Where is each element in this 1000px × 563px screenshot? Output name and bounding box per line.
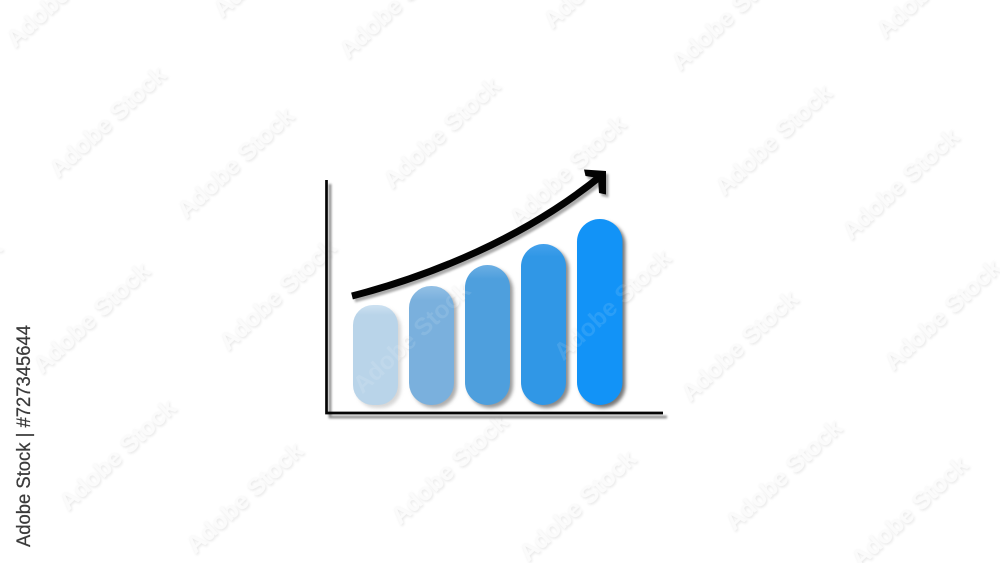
watermark: repeated Adobe Stock text: Adobe Stock <box>378 72 506 194</box>
bar chart <box>326 170 677 417</box>
side label: stock id: Adobe Stock | #727345644 <box>14 325 35 547</box>
watermark: repeated Adobe Stock text: Adobe Stock <box>54 394 182 516</box>
watermark: repeated Adobe Stock text: Adobe Stock <box>348 277 476 399</box>
watermark: repeated Adobe Stock text: Adobe Stock <box>837 123 965 245</box>
watermark: repeated Adobe Stock text: Adobe Stock <box>172 102 300 224</box>
watermark over bars: Adobe Stock <box>549 244 677 366</box>
watermark over bars: Adobe Stock <box>348 277 476 399</box>
watermark: repeated Adobe Stock text: Adobe Stock <box>386 408 514 530</box>
watermark: repeated Adobe Stock text: Adobe Stock <box>720 414 848 536</box>
bar 4 <box>521 244 569 408</box>
watermark: repeated Adobe Stock text: Adobe Stock <box>549 244 677 366</box>
watermark over bars <box>348 244 677 399</box>
watermark: repeated Adobe Stock text: Adobe Stock <box>44 61 172 183</box>
watermark: repeated Adobe Stock text: Adobe Stock <box>676 285 804 407</box>
watermark: repeated Adobe Stock text: Adobe Stock <box>214 234 342 356</box>
bar 3 <box>465 265 513 408</box>
watermark: repeated Adobe Stock text: Adobe Stock <box>710 79 838 201</box>
bar 1 <box>353 305 401 408</box>
arrow: growth trend <box>352 170 608 299</box>
bar 5 <box>577 219 626 408</box>
watermark: repeated Adobe Stock text: Adobe Stock <box>504 110 632 232</box>
axes <box>326 180 667 417</box>
watermark: repeated Adobe Stock text: Adobe Stock <box>28 257 156 379</box>
watermark: repeated Adobe Stock text: Adobe Stock <box>181 437 309 559</box>
bar 2 <box>409 286 457 408</box>
